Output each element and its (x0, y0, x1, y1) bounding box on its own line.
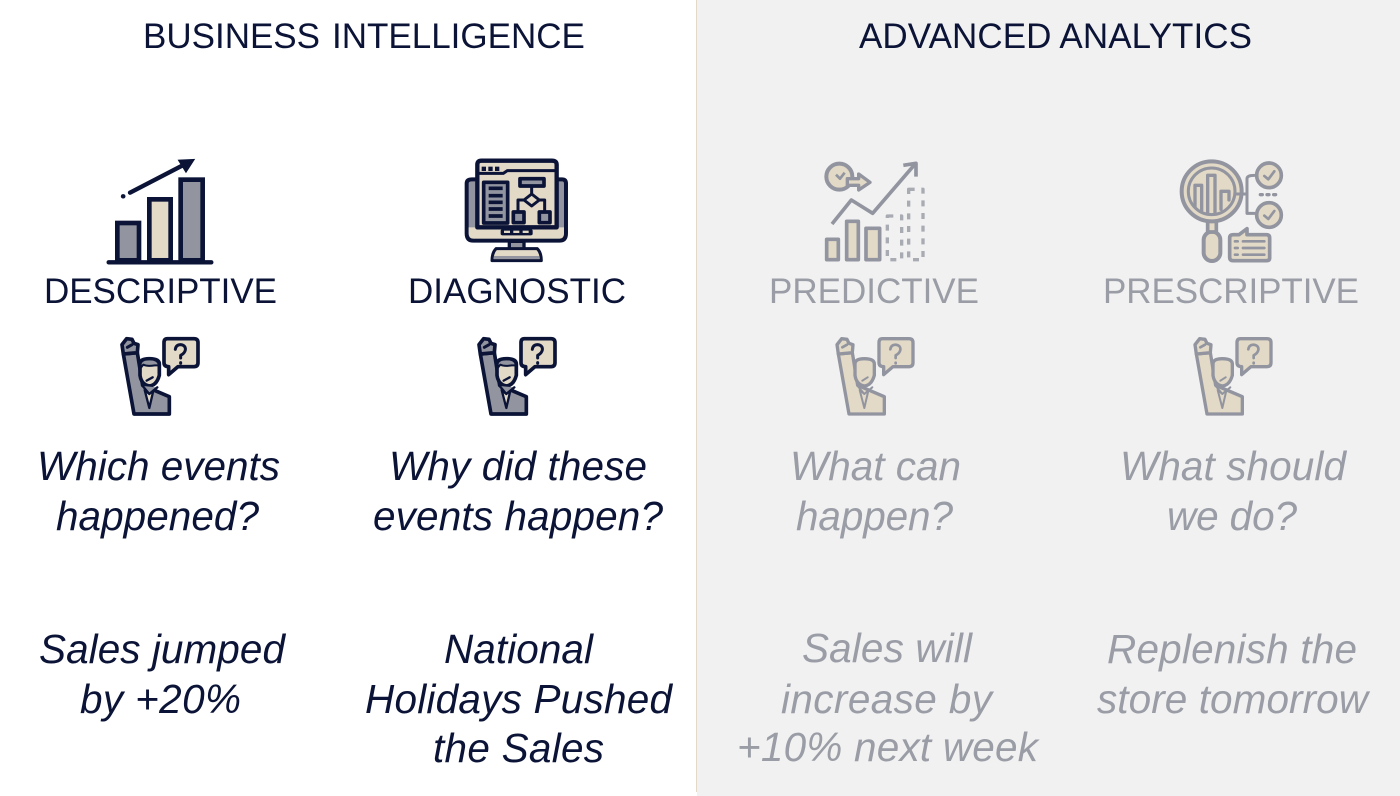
heading: advanced analytics: ADVANCED ANALYTICS (859, 17, 1252, 56)
icon: descriptive bar chart with arrow (109, 160, 211, 262)
example: diagnostic: Holidays Pushed (365, 676, 673, 722)
icon: person asking question, predictive (837, 339, 913, 414)
icon: diagnostic monitor with flowchart (467, 161, 566, 261)
question: prescriptive: we do? (1167, 493, 1297, 539)
question: prescriptive: What should (1120, 443, 1347, 489)
example: diagnostic: National (444, 626, 594, 672)
example: descriptive: Sales jumped (39, 626, 286, 672)
example: diagnostic: the Sales (433, 725, 604, 771)
example: descriptive: by +20% (80, 676, 241, 722)
panel: advanced analytics background (697, 0, 1400, 796)
icon: person asking question, diagnostic (479, 339, 555, 414)
panel: business intelligence background (0, 0, 696, 796)
icon: person asking question, descriptive (122, 339, 198, 414)
heading: business intelligence: INTELLIGENCE (332, 17, 585, 56)
example: prescriptive: Replenish the (1107, 626, 1357, 672)
icon: prescriptive magnifier with checks (1182, 161, 1281, 261)
label: diagnostic: DIAGNOSTIC (408, 272, 626, 311)
question: descriptive: Which events (37, 443, 280, 489)
question: diagnostic: events happen? (373, 493, 663, 539)
question: diagnostic: Why did these (389, 443, 647, 489)
question: descriptive: happened? (56, 493, 259, 539)
label: descriptive: DESCRIPTIVE (44, 272, 277, 311)
question: predictive: happen? (796, 493, 953, 539)
question: predictive: What can (790, 443, 961, 489)
icon: predictive chart with clock (826, 163, 923, 260)
label: prescriptive: PRESCRIPTIVE (1103, 272, 1359, 311)
icon: person asking question, prescriptive (1195, 339, 1271, 414)
label: predictive: PREDICTIVE (769, 272, 979, 311)
example: predictive: Sales will (802, 625, 973, 671)
example: prescriptive: store tomorrow (1097, 676, 1371, 722)
example: predictive: increase by (781, 676, 995, 722)
example: predictive: +10% next week (737, 724, 1040, 770)
heading: business intelligence: BUSINESS (143, 17, 320, 56)
